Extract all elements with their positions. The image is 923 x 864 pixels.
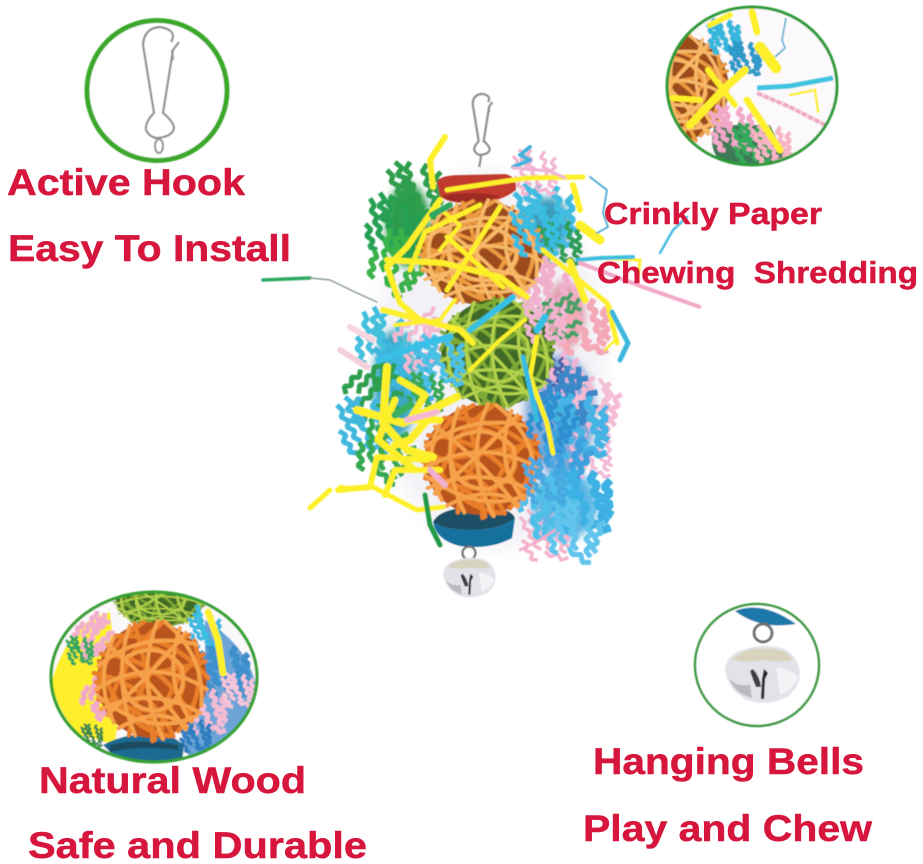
wicker ball: green middle [417, 276, 577, 430]
red wood block [437, 174, 516, 203]
heading: active hook: Active Hook [7, 162, 245, 203]
text: play and chew: Play and Chew [583, 808, 872, 849]
blue wood block [433, 507, 515, 547]
heading: natural wood: Natural Wood [39, 760, 306, 801]
panel: central toy illustration [263, 94, 700, 598]
callout: crinkly paper [597, 7, 918, 290]
yellow paper strands [310, 137, 640, 510]
heading: hanging bells: Hanging Bells [593, 741, 864, 782]
icon: bell in green circle [695, 604, 819, 726]
text: easy to install: Easy To Install [8, 228, 291, 269]
callout: active hook [7, 20, 291, 269]
callout: hanging bells [583, 604, 872, 849]
text: chewing shredding: Chewing Shredding [597, 255, 918, 290]
heading: crinkly paper: Crinkly Paper [604, 196, 822, 231]
wicker ball: orange bottom [400, 382, 563, 537]
callout: natural wood [28, 590, 366, 858]
hook on toy [473, 94, 492, 167]
icon: paper detail in green circle [664, 4, 840, 168]
wicker ball: orange top [396, 179, 567, 326]
bell on toy [443, 546, 496, 598]
paper over ball edges [405, 205, 586, 502]
icon: hook in green circle [87, 20, 227, 160]
cyan and pink strands [263, 147, 700, 550]
icon: wicker ball in green ellipse [48, 590, 260, 764]
